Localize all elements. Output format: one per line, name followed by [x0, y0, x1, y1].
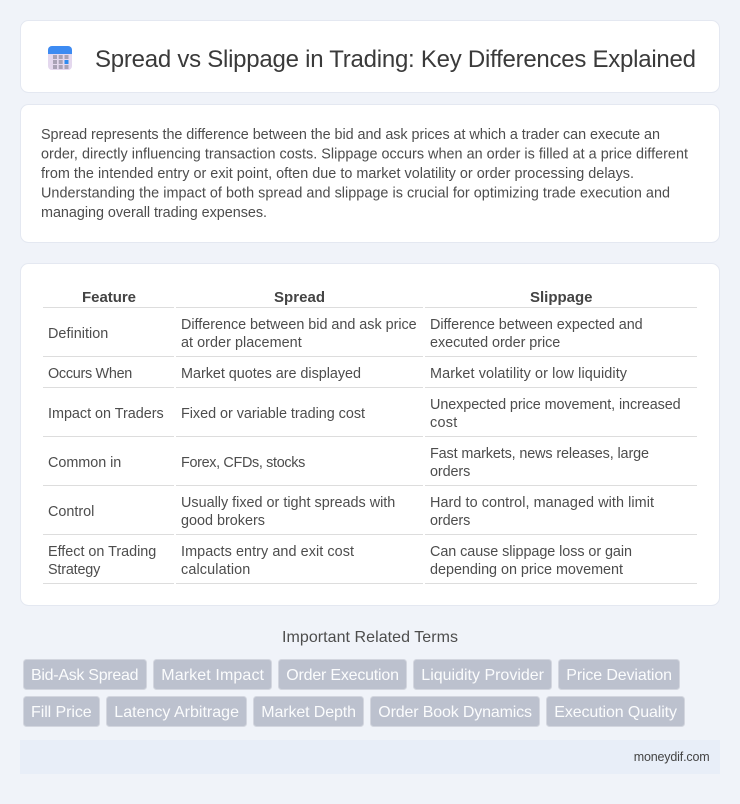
- text block: summary: [41, 127, 688, 221]
- table row: Impact on Traders: Fixed or variable trading cost: [181, 406, 365, 422]
- tag: Execution Quality: Execution Quality: [554, 704, 677, 721]
- table row: Definition: Definition: [48, 326, 108, 342]
- table row: Occurs When: Occurs When: [48, 366, 132, 382]
- table row: Common in: Forex, CFDs, stocks: [181, 455, 305, 471]
- table row: Control: good brokers: [181, 513, 265, 529]
- table row: Control: Usually fixed or tight spreads with: [181, 495, 395, 511]
- tag: Order Book Dynamics: [370, 696, 540, 726]
- table row: Definition: Difference between bid and ask price: [181, 317, 417, 333]
- table row: Control: [43, 495, 697, 535]
- tag: Liquidity Provider: Liquidity Provider: [421, 667, 545, 684]
- text block: summary: from the intended entry or exit point, often due to market volatility or order processing delays.: [41, 166, 634, 182]
- tag list: related terms: [24, 660, 684, 726]
- table row: Effect on Trading Strategy: Strategy: [48, 562, 101, 578]
- tag: Execution Quality: [546, 696, 684, 726]
- tag: Liquidity Provider: [414, 660, 552, 690]
- table row: Common in: Fast markets, news releases, large: [430, 446, 649, 462]
- footer source text: moneydif.com: [634, 750, 710, 764]
- table row: Effect on Trading Strategy: calculation: [181, 562, 250, 578]
- table row: Effect on Trading Strategy: Can cause slippage loss or gain: [430, 544, 632, 560]
- tag: Fill Price: Fill Price: [31, 704, 92, 721]
- tag: Price Deviation: Price Deviation: [566, 667, 672, 684]
- table row: Definition: [43, 317, 697, 357]
- heading: Important Related Terms: Important Related Terms: [282, 629, 458, 646]
- table row: Occurs When: [43, 366, 697, 388]
- table row: Definition: executed order price: [430, 335, 560, 351]
- table header: [43, 289, 697, 308]
- panel: summary paragraph: [20, 104, 720, 242]
- tag: Fill Price: [24, 696, 100, 726]
- text block: summary: order, directly influencing transaction costs. Slippage occurs when an order is filled at a price different: [41, 146, 688, 162]
- table header: Spread: [274, 289, 325, 306]
- tag: Market Depth: Market Depth: [261, 704, 356, 721]
- table row: Definition: Difference between expected and: [430, 317, 643, 333]
- table row: Common in: Common in: [48, 455, 121, 471]
- tag: Bid-Ask Spread: [24, 660, 146, 690]
- title: Spread vs Slippage in Trading: Key Differences Explained: [95, 46, 696, 73]
- table row: Impact on Traders: Unexpected price movement, increased: [430, 397, 681, 413]
- tag: Order Book Dynamics: Order Book Dynamics: [378, 704, 532, 721]
- table row: Effect on Trading Strategy: depending on price movement: [430, 562, 623, 578]
- table row: Effect on Trading Strategy: [43, 544, 697, 584]
- table row: Effect on Trading Strategy: Impacts entry and exit cost: [181, 544, 354, 560]
- text block: summary: Spread represents the difference between the bid and ask prices at which a trader can execute an: [41, 127, 660, 143]
- text block: summary: Understanding the impact of both spread and slippage is crucial for optimizing trade execution and: [41, 186, 670, 202]
- panel: title header: [20, 20, 720, 92]
- panel: comparison table: [20, 264, 720, 606]
- icon: calendar: [48, 46, 72, 70]
- tag: Latency Arbitrage: [106, 696, 246, 726]
- table row: Common in: [43, 446, 697, 486]
- table row: Effect on Trading Strategy: Effect on Trading: [48, 544, 156, 560]
- table row: Occurs When: Market volatility or low liquidity: [430, 366, 628, 382]
- table row: Control: orders: [430, 513, 470, 529]
- footer bar: [20, 740, 720, 774]
- table row: Definition: at order placement: [181, 335, 302, 351]
- table header: Slippage: [530, 289, 592, 306]
- tag: Market Impact: [154, 660, 272, 690]
- table row: Impact on Traders: [43, 397, 697, 437]
- table row: Common in: orders: [430, 464, 470, 480]
- tag: Bid-Ask Spread: Bid-Ask Spread: [31, 667, 138, 684]
- tag: Order Execution: [278, 660, 406, 690]
- table row: Occurs When: Market quotes are displayed: [181, 366, 361, 382]
- table row: Impact on Traders: Impact on Traders: [48, 406, 164, 422]
- table row: Impact on Traders: cost: [430, 415, 457, 431]
- text block: summary: managing overall trading expenses.: [41, 205, 267, 221]
- tag: Market Impact: Market Impact: [161, 667, 265, 684]
- table row: Control: Control: [48, 504, 94, 520]
- tag: Price Deviation: [558, 660, 680, 690]
- table row: Control: Hard to control, managed with limit: [430, 495, 654, 511]
- table header: Feature: [82, 289, 136, 306]
- tag: Order Execution: Order Execution: [286, 667, 399, 684]
- tag: Latency Arbitrage: Latency Arbitrage: [114, 704, 239, 721]
- tag: Market Depth: [254, 696, 364, 726]
